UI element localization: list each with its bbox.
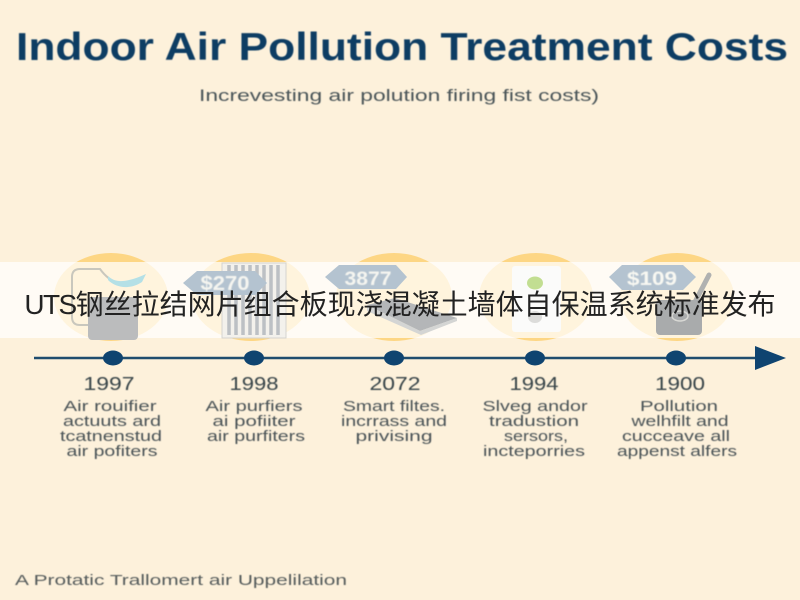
milestone 1994: Slveg andor — [482, 399, 588, 415]
milestone 1997: 1997 — [84, 374, 134, 394]
milestone 1997: actuuts ard — [63, 414, 161, 430]
milestone 1994 — [482, 374, 588, 460]
banner headline: UTS钢丝拉结网片组合板现浇混凝土墙体自保温系统标准发布 — [24, 289, 776, 320]
icon: air filter with price 1998 — [183, 263, 286, 338]
translucent banner — [0, 262, 800, 338]
milestone 1997: air pofiters — [66, 444, 158, 460]
timeline axis with arrow — [34, 346, 786, 370]
icon: air purifier 1997 — [72, 269, 146, 340]
milestone 1900: welhfilt and — [630, 414, 728, 430]
footer note: A Protatic Trallomert air Uppelilation — [15, 572, 347, 589]
milestone 2072: Smart filtes. — [343, 399, 445, 415]
milestone 1997 — [60, 374, 162, 460]
milestone 1994: incteporries — [483, 444, 585, 460]
price tag: $270: $270 — [200, 273, 250, 295]
milestone 1998: air purfiters — [207, 429, 305, 445]
milestone 2072: incrrass and — [341, 414, 447, 430]
icon: sensor device 1994 — [512, 266, 561, 332]
milestone 1900: appenst alfers — [617, 444, 737, 460]
milestone 1900: 1900 — [655, 374, 705, 394]
milestone 2072: privising — [356, 429, 432, 445]
milestone 1998: Air purfiers — [206, 399, 302, 415]
milestone 1900: cucceave all — [622, 429, 730, 445]
icon: smart filter with price 2072 — [325, 265, 457, 335]
halo discs behind icons — [54, 253, 734, 341]
subtitle: Increvesting air polution firing fist costs) — [199, 86, 599, 105]
price tag: 3877: 3877 — [344, 269, 392, 290]
price tag: $109: $109 — [627, 269, 677, 290]
milestone 1998: ai pofiiter — [212, 414, 296, 430]
milestone 2072: 2072 — [370, 374, 420, 394]
milestone 1998 — [206, 374, 305, 445]
icon: purifier with price 1900 — [609, 265, 709, 335]
milestone 1997: tcatnenstud — [60, 429, 162, 445]
milestone 1900 — [617, 374, 737, 460]
milestone 1994: 1994 — [510, 374, 558, 394]
milestone 1994: tradustion — [489, 414, 579, 430]
milestone 1997: Air rouifier — [64, 399, 157, 415]
milestone 1900: Pollution — [640, 399, 718, 415]
milestone 2072 — [341, 374, 447, 445]
milestone 1994: sersors, — [504, 429, 568, 445]
milestone 1998: 1998 — [230, 374, 278, 394]
title: Indoor Air Pollution Treatment Costs — [16, 26, 788, 69]
